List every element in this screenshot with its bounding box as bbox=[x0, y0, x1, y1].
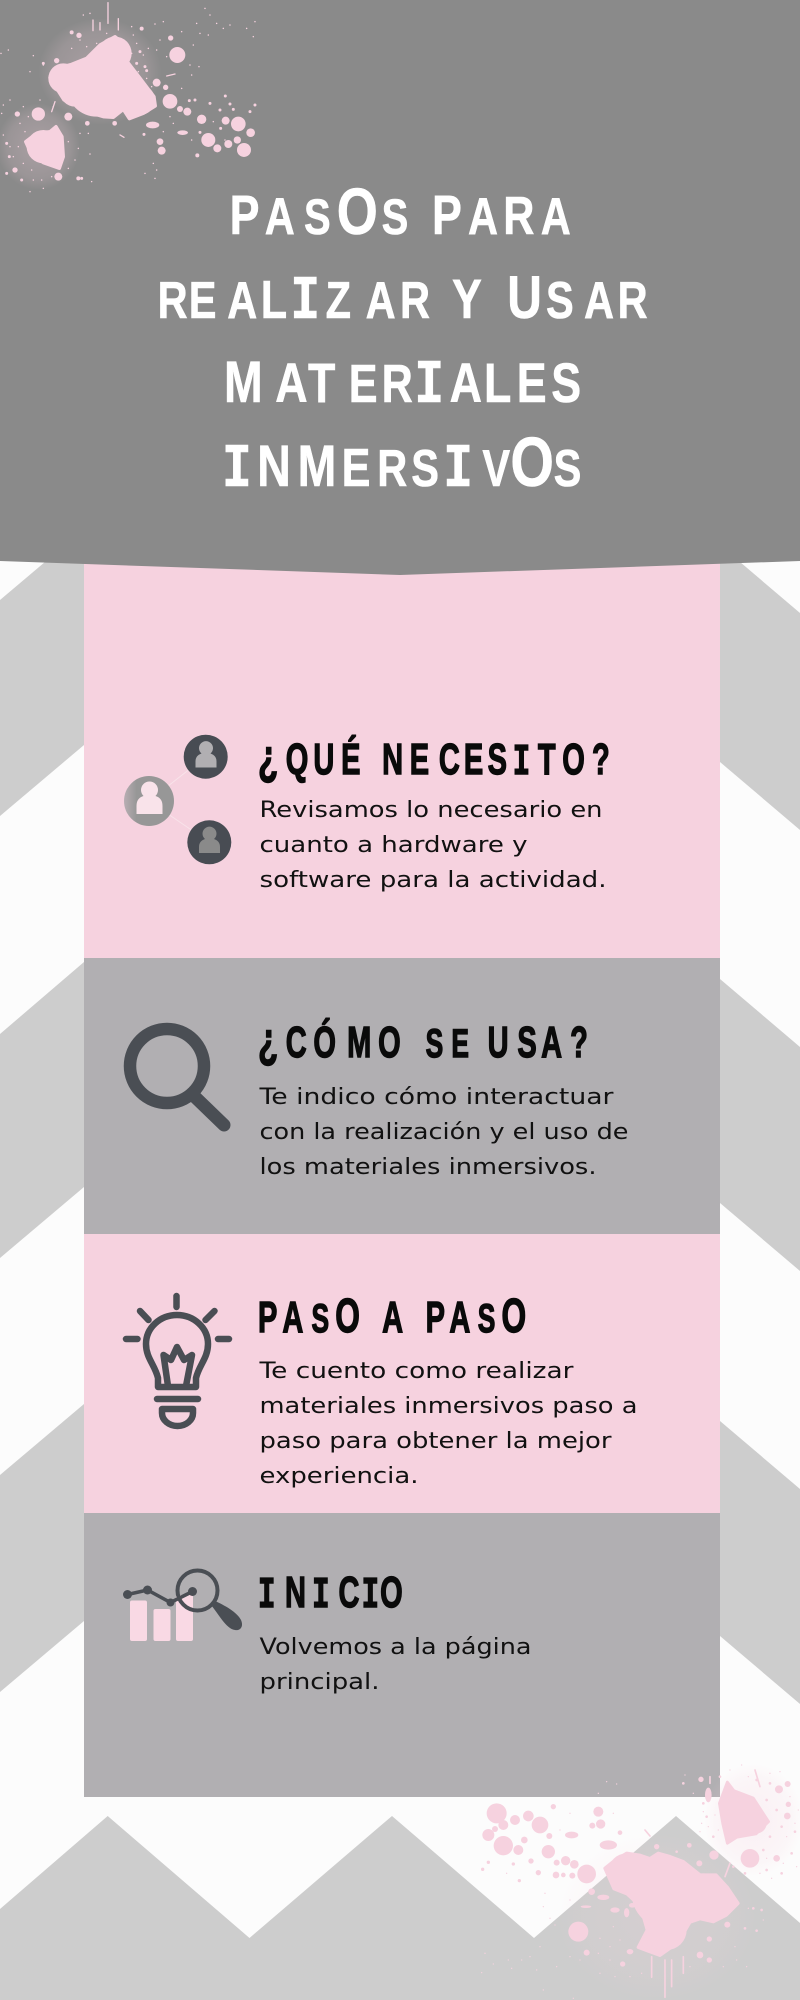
icon: magnifying glass bbox=[130, 1029, 224, 1125]
header banner bbox=[0, 0, 800, 575]
background chevrons bbox=[0, 529, 800, 2000]
text: paso a paso bbox=[258, 1358, 638, 1489]
heading: que necesito: ¿QUÉ NECESITO? bbox=[258, 729, 610, 788]
text: paso a paso: experiencia. bbox=[260, 1463, 418, 1489]
text: inicio: principal. bbox=[260, 1669, 380, 1695]
text: inicio bbox=[260, 1634, 532, 1695]
panel: que necesito bbox=[84, 560, 720, 958]
text: como se usa: Te indico cómo interactuar bbox=[258, 1084, 614, 1110]
panel: paso a paso bbox=[84, 1234, 720, 1513]
text: que necesito: cuanto a hardware y bbox=[260, 832, 528, 858]
panel: como se usa bbox=[84, 958, 720, 1234]
heading: paso a paso: PASO A PASO bbox=[258, 1288, 526, 1343]
text: que necesito: software para la actividad. bbox=[260, 867, 606, 893]
title: REALIZAR Y USAR bbox=[158, 264, 648, 337]
title: INMERSIVOS bbox=[222, 424, 581, 505]
text: paso a paso: materiales inmersivos paso a bbox=[260, 1393, 638, 1419]
text: paso a paso: Te cuento como realizar bbox=[258, 1358, 574, 1384]
title: PASOS PARA bbox=[230, 174, 571, 248]
title bbox=[158, 174, 648, 505]
text: que necesito bbox=[260, 797, 606, 893]
heading: como se usa: ¿CÓMO SE USA? bbox=[258, 1012, 588, 1068]
panel: inicio bbox=[84, 1513, 720, 1797]
text: como se usa: con la realización y el uso de bbox=[260, 1119, 628, 1145]
title: MATERIALES bbox=[224, 350, 581, 421]
text: inicio: Volvemos a la página bbox=[260, 1634, 532, 1660]
splatter: bottom right bbox=[481, 1763, 800, 2000]
icon: people network bbox=[124, 735, 231, 864]
text: que necesito: Revisamos lo necesario en bbox=[260, 797, 602, 823]
heading: inicio: INICIO bbox=[258, 1567, 403, 1621]
splatter: top left bbox=[0, 3, 255, 192]
icon: light bulb bbox=[126, 1296, 229, 1426]
text: como se usa bbox=[258, 1084, 628, 1180]
text: como se usa: los materiales inmersivos. bbox=[260, 1154, 596, 1180]
icon: chart with magnifier bbox=[123, 1570, 242, 1641]
text: paso a paso: paso para obtener la mejor bbox=[260, 1428, 612, 1454]
